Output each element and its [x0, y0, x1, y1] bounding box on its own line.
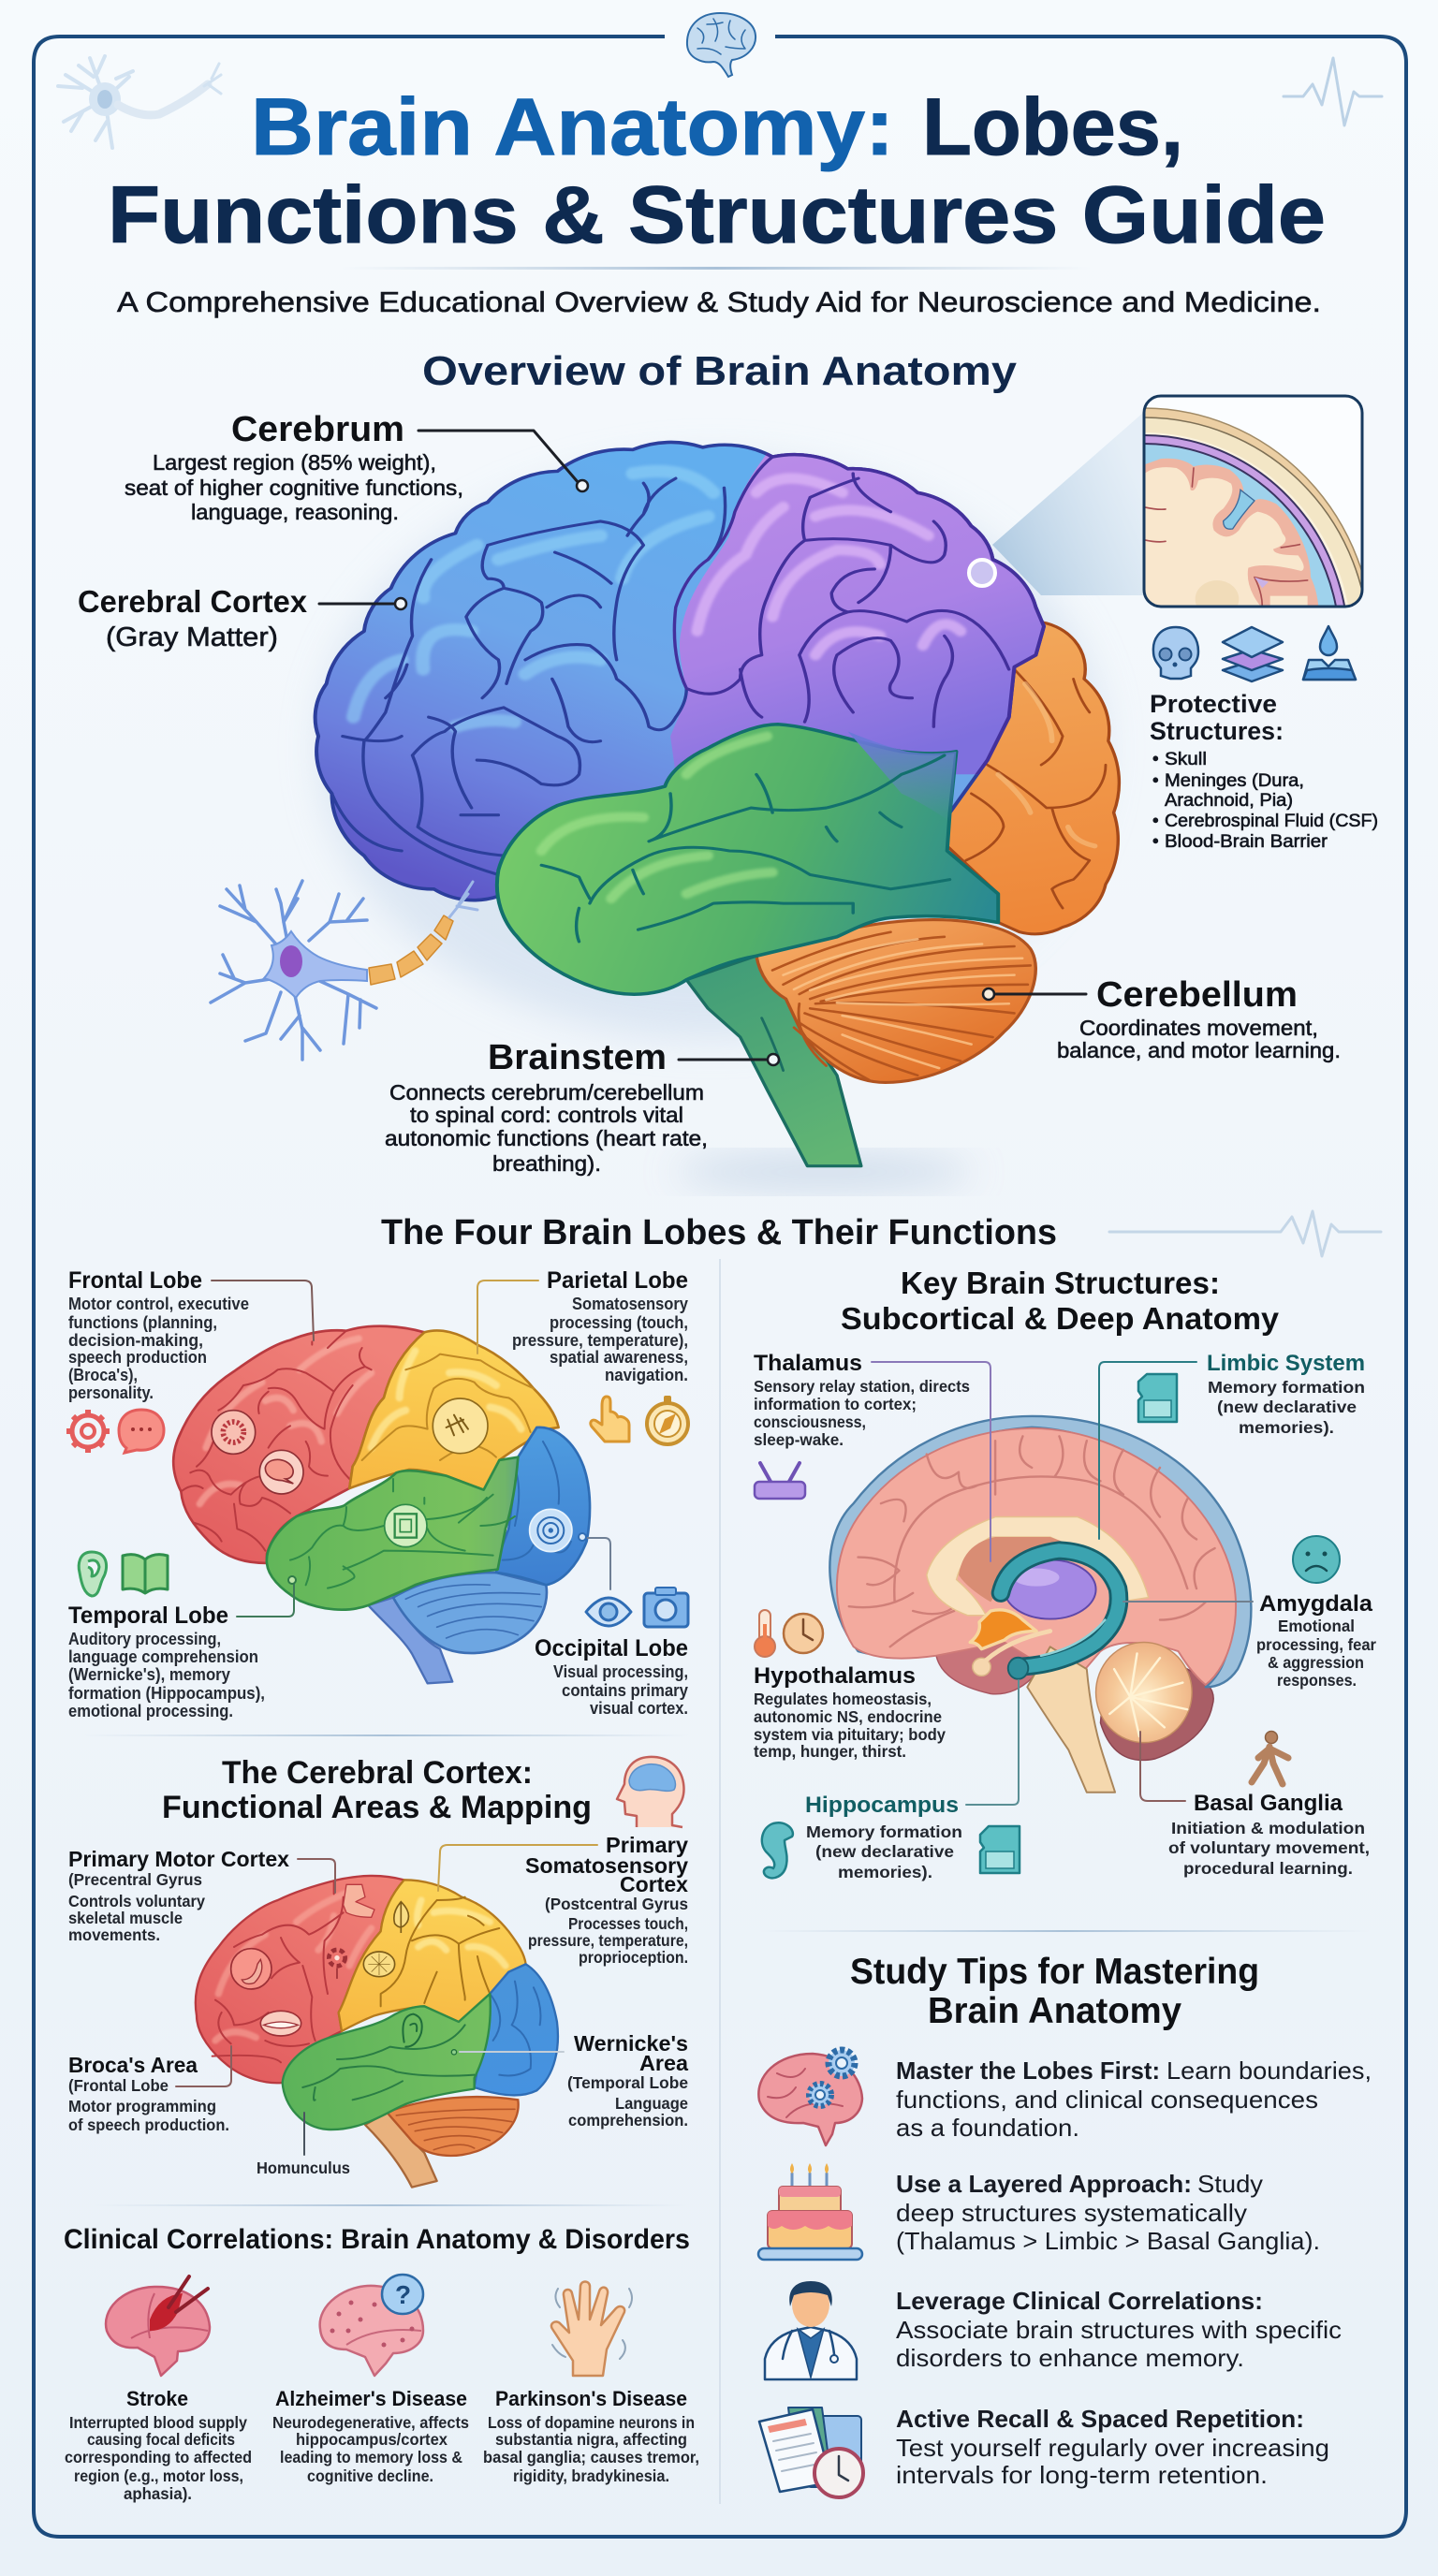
disorder: parkinson's: rigidity, bradykinesia.: [513, 2466, 669, 2485]
callout: temporal lobe: [68, 1576, 296, 1720]
callout: brainstem: Brainstem: [488, 1038, 667, 1077]
callout: thalamus: consciousness,: [754, 1412, 866, 1431]
callout: primary motor cortex: (Precentral Gyrus: [68, 1870, 202, 1889]
icon: ear: [79, 1552, 107, 1596]
callout: primary somatosensory cortex: proprioception.: [579, 1948, 688, 1967]
disorder: alzheimer's: leading to memory loss &: [280, 2448, 462, 2466]
icon: gear: [66, 1410, 110, 1453]
callout: brainstem: to spinal cord: controls vital: [410, 1103, 683, 1127]
callout: frontal lobe: Motor control, executive: [68, 1295, 249, 1313]
protective structures text: Meninges (Dura,: [1165, 771, 1304, 791]
protective structures text: Arachnoid, Pia): [1165, 791, 1293, 811]
callout: primary motor cortex: Controls voluntary: [68, 1892, 205, 1910]
temporal region: [283, 1994, 491, 2130]
brainstem: [686, 956, 861, 1166]
callout: cerebrum: seat of higher cognitive functions,: [125, 476, 463, 500]
parietal lobe: [349, 1330, 559, 1490]
icon: skull: [1153, 627, 1198, 679]
tip 4: [896, 2405, 1329, 2489]
title: Brain Anatomy:: [251, 82, 894, 172]
icon: faint heartbeat line: [1284, 58, 1382, 125]
tip 3: [896, 2287, 1342, 2372]
heading: cerebral cortex: The Cerebral Cortex:: [222, 1755, 533, 1791]
protective structures text: Structures:: [1150, 717, 1284, 745]
icon: memory card: [980, 1826, 1020, 1873]
callout: primary somatosensory cortex: (Postcentral Gyrus: [545, 1895, 688, 1913]
cerebellum: [756, 920, 1035, 1082]
heading: cerebral cortex: [162, 1755, 592, 1825]
icon: speech bubble: [119, 1410, 164, 1453]
disorder: stroke: [65, 2387, 252, 2503]
disorder: alzheimer's: Alzheimer's Disease: [275, 2387, 467, 2410]
tip 2: Use a Layered Approach:: [896, 2170, 1192, 2198]
callout: hypothalamus: Regulates homeostasis,: [754, 1690, 932, 1708]
cerebellum and stem: [365, 2097, 519, 2188]
callout: hypothalamus: Hypothalamus: [754, 1663, 916, 1689]
callout: parietal lobe: [477, 1267, 688, 1384]
tip 1: functions, and clinical consequences: [896, 2086, 1318, 2114]
callout: cerebrum: Cerebrum: [231, 410, 404, 449]
callout: limbic system: (new declarative: [1217, 1398, 1357, 1416]
occipital region: [475, 1964, 558, 2095]
callout: cerebellum: balance, and motor learning.: [1057, 1038, 1341, 1062]
callout: hypothalamus: system via pituitary; body: [754, 1725, 946, 1744]
callout: frontal lobe: Frontal Lobe: [68, 1267, 202, 1294]
icon: pointing hand: [591, 1397, 629, 1442]
callout: hippocampus: [805, 1680, 1019, 1881]
callout: basal ganglia: procedural learning.: [1183, 1859, 1353, 1878]
callout: thalamus: sleep-wake.: [754, 1430, 844, 1449]
callout: limbic system: Limbic System: [1207, 1351, 1365, 1376]
tip 3: Leverage Clinical Correlations:: [896, 2287, 1263, 2315]
callout: basal ganglia: Basal Ganglia: [1194, 1791, 1343, 1816]
callout: occipital lobe: contains primary: [562, 1681, 688, 1700]
inset: protective layers cross-section: [1142, 395, 1363, 608]
tip 2: deep structures systematically: [896, 2199, 1247, 2227]
tip 4: Test yourself regularly over increasing: [896, 2434, 1329, 2462]
heading: cerebral cortex: Functional Areas & Mapping: [162, 1790, 592, 1825]
disorder: stroke: Stroke: [126, 2387, 188, 2410]
callout: cerebellum: [983, 975, 1341, 1062]
cerebellum and stem: [368, 1573, 547, 1683]
disorder: parkinson's: basal ganglia; causes tremor,: [483, 2448, 699, 2466]
title: Functions & Structures Guide: [108, 170, 1326, 260]
callout: amygdala: & aggression: [1268, 1653, 1364, 1672]
icon: clock: [784, 1614, 823, 1653]
title: Lobes,: [922, 82, 1183, 172]
tip 2: Study: [1197, 2170, 1263, 2198]
callout: basal ganglia: of voluntary movement,: [1168, 1838, 1370, 1857]
callout: frontal lobe: decision-making,: [68, 1331, 203, 1350]
callout: parietal lobe: Parietal Lobe: [547, 1267, 688, 1294]
callout: hypothalamus: autonomic NS, endocrine: [754, 1707, 942, 1726]
subtitle: A Comprehensive Educational Overview & Study Aid for Neuroscience and Medicine.: [117, 285, 1321, 318]
callout: homunculus: Homunculus: [257, 2159, 350, 2177]
callout: thalamus: [754, 1351, 990, 1561]
icon: memory card: [1138, 1374, 1177, 1422]
callout: broca's area: of speech production.: [68, 2115, 229, 2134]
callout: occipital lobe: Visual processing,: [553, 1662, 688, 1681]
callout: temporal lobe: Temporal Lobe: [68, 1603, 228, 1629]
icon: router: [755, 1463, 805, 1499]
icon: walking figure: [1252, 1732, 1288, 1784]
protective structures text: Cerebrospinal Fluid (CSF): [1165, 812, 1378, 831]
callout: parietal lobe: processing (touch,: [550, 1313, 688, 1332]
callout: brainstem: Connects cerebrum/cerebellum: [389, 1080, 704, 1105]
callout: temporal lobe: language comprehension: [68, 1647, 258, 1666]
icon: sad face: [1293, 1536, 1340, 1583]
cortex brain illustration: [196, 1876, 558, 2188]
icon: meninges layers: [1223, 627, 1283, 681]
disorder: stroke: region (e.g., motor loss,: [74, 2466, 243, 2485]
disorder: parkinson's: Loss of dopamine neurons in: [488, 2413, 695, 2432]
disorder: alzheimer's: hippocampus/cortex: [296, 2430, 448, 2449]
callout: thalamus: Sensory relay station, directs: [754, 1377, 970, 1396]
lobes brain illustration: [173, 1326, 590, 1683]
callout: frontal lobe: functions (planning,: [68, 1313, 217, 1332]
inset cone: [992, 412, 1144, 595]
protective structures text: [1150, 690, 1378, 852]
callout: hippocampus: Hippocampus: [805, 1793, 959, 1818]
callout: temporal lobe: emotional processing.: [68, 1702, 233, 1720]
sagittal brain illustration: [829, 1416, 1251, 1793]
tip 2: (Thalamus > Limbic > Basal Ganglia).: [896, 2227, 1320, 2255]
callout: brainstem: autonomic functions (heart rate,: [385, 1126, 708, 1150]
icon: alzheimer brain with question: [320, 2275, 423, 2376]
callout: parietal lobe: navigation.: [605, 1366, 688, 1384]
callout: broca's area: [68, 2046, 231, 2134]
icon: head with brain: [617, 1757, 683, 1827]
callout: basal ganglia: Initiation & modulation: [1171, 1819, 1365, 1837]
occipital lobe: [496, 1427, 590, 1585]
callout: brainstem: breathing).: [492, 1151, 601, 1176]
icon: open book: [123, 1555, 168, 1593]
disorder: stroke: Interrupted blood supply: [69, 2413, 247, 2432]
callout: broca's area: Broca's Area: [68, 2053, 198, 2077]
callout: wernicke's area: comprehension.: [568, 2111, 688, 2130]
callout: frontal lobe: speech production: [68, 1348, 207, 1367]
lower forebrain: [936, 1633, 1050, 1694]
heading: key brain structures: Subcortical & Deep Anatomy: [841, 1301, 1280, 1336]
callout: hippocampus: memories).: [838, 1863, 932, 1881]
heading: clinical correlations: Clinical Correlations: Brain Anatomy & Disorders: [64, 2224, 690, 2255]
callout: cerebral cortex: (Gray Matter): [106, 622, 278, 652]
icon: faint neuron decoration: [58, 56, 221, 148]
limbic ring: [1001, 1550, 1119, 1667]
disorder: stroke: corresponding to affected: [65, 2448, 252, 2466]
callout: wernicke's area: Language: [615, 2094, 688, 2113]
callout: amygdala: [1123, 1591, 1376, 1690]
callout: amygdala: Amygdala: [1259, 1591, 1373, 1617]
callout: frontal lobe: (Broca's),: [68, 1366, 138, 1384]
callout marker: inset source: [969, 560, 995, 586]
thalamus: [1005, 1559, 1096, 1619]
callout: limbic system: memories).: [1239, 1418, 1334, 1437]
callout: limbic system: [1099, 1351, 1365, 1539]
icon: doctor: [765, 2281, 857, 2379]
icon: eye: [586, 1598, 631, 1626]
callout: wernicke's area: Area: [639, 2051, 688, 2075]
disorder: parkinson's: Parkinson's Disease: [495, 2387, 687, 2410]
occipital lobe: [947, 622, 1119, 934]
callout: wernicke's area: [460, 2031, 688, 2130]
icon: alzheimer brain with question: ?: [395, 2280, 411, 2309]
callout: hypothalamus: temp, hunger, thirst.: [754, 1742, 906, 1761]
callout: amygdala: responses.: [1277, 1671, 1357, 1690]
main brain illustration: [315, 442, 1119, 1187]
callout: cerebral cortex: Cerebral Cortex: [78, 584, 308, 619]
callout: cerebrum: Largest region (85% weight),: [153, 450, 436, 475]
meninges arc: [829, 1416, 1251, 1687]
callout: primary somatosensory cortex: Cortex: [620, 1872, 688, 1896]
callout: primary somatosensory cortex: Primary: [606, 1833, 688, 1857]
callout: thalamus: information to cortex;: [754, 1395, 917, 1413]
callout: amygdala: processing, fear: [1256, 1635, 1376, 1654]
heading: key brain structures: Key Brain Structures:: [901, 1266, 1220, 1300]
protective icons: [1153, 626, 1356, 681]
heading: study tips: Brain Anatomy: [928, 1991, 1181, 2031]
icon: parkinson's trembling hand: [551, 2282, 632, 2376]
protective structures text: •: [1152, 832, 1159, 852]
cerebrum pink folds: [837, 1428, 1236, 1685]
brainstem: [1027, 1647, 1115, 1793]
tip 1: [896, 2056, 1372, 2142]
heading: key brain structures: [841, 1266, 1280, 1336]
callout: occipital lobe: Occipital Lobe: [535, 1635, 688, 1661]
callout: hippocampus: (new declarative: [815, 1842, 954, 1861]
icon: stroke brain: [106, 2276, 210, 2376]
protective structures text: •: [1152, 812, 1159, 831]
callout: basal ganglia: [1140, 1732, 1370, 1878]
title: [108, 82, 1326, 260]
temporal lobe: [267, 1457, 518, 1610]
callout: primary motor cortex: movements.: [68, 1925, 160, 1944]
temporal lobe: [497, 724, 998, 994]
callout: broca's area: (Frontal Lobe: [68, 2076, 169, 2095]
tip 3: disorders to enhance memory.: [896, 2344, 1244, 2372]
icon: heartbeat divider: [1109, 1211, 1381, 1256]
disorder: parkinson's: [483, 2387, 699, 2485]
hypothalamus: [970, 1610, 1050, 1676]
tip 1: Learn boundaries,: [1167, 2056, 1372, 2085]
callout: primary motor cortex: Primary Motor Cortex: [68, 1847, 289, 1871]
heading: study tips: Study Tips for Mastering: [850, 1952, 1259, 1992]
icon: seahorse: [762, 1822, 793, 1878]
callout: parietal lobe: Somatosensory: [572, 1295, 688, 1313]
callout: parietal lobe: spatial awareness,: [550, 1348, 688, 1367]
callout: broca's area: Motor programming: [68, 2097, 216, 2115]
icon: camera: [644, 1588, 688, 1627]
disorder: alzheimer's: cognitive decline.: [307, 2466, 433, 2485]
callout: brainstem: [385, 1038, 779, 1176]
inner ventricle: [959, 1537, 1087, 1602]
cerebrum blue and purple: [315, 442, 1044, 908]
parietal region: [339, 1880, 526, 2031]
tip 1: as a foundation.: [896, 2114, 1079, 2142]
callout: hypothalamus: [754, 1663, 946, 1761]
corpus callosum: [927, 1517, 1149, 1616]
callout: primary somatosensory cortex: [438, 1833, 688, 1967]
icon: thermometer: [755, 1610, 775, 1657]
callout: temporal lobe: (Wernicke's), memory: [68, 1665, 230, 1684]
callout: occipital lobe: visual cortex.: [590, 1699, 688, 1718]
callout: occipital lobe: [535, 1533, 688, 1718]
tip 4: intervals for long-term retention.: [896, 2461, 1268, 2489]
callout: cerebrum: language, reasoning.: [191, 500, 399, 524]
callout: temporal lobe: formation (Hippocampus),: [68, 1684, 265, 1703]
callout: frontal lobe: [68, 1267, 314, 1402]
callout: thalamus: Thalamus: [754, 1351, 862, 1376]
heading: overview: Overview of Brain Anatomy: [422, 348, 1018, 394]
callout: parietal lobe: pressure, temperature),: [512, 1331, 688, 1350]
callout: frontal lobe: personality.: [68, 1383, 154, 1402]
callout: cerebellum: Coordinates movement,: [1079, 1016, 1318, 1040]
callout: primary somatosensory cortex: pressure, temperature,: [528, 1931, 688, 1950]
protective structures text: Skull: [1165, 750, 1207, 769]
callout: wernicke's area: (Temporal Lobe: [567, 2073, 688, 2092]
protective structures text: •: [1152, 771, 1159, 791]
callout: primary somatosensory cortex: Somatosensory: [525, 1853, 688, 1878]
disorder: alzheimer's: Neurodegenerative, affects: [272, 2413, 469, 2432]
callout: limbic system: Memory formation: [1208, 1378, 1365, 1397]
disorder: stroke: aphasia).: [124, 2484, 192, 2503]
callout: wernicke's area: Wernicke's: [574, 2031, 688, 2056]
disorder: alzheimer's: [272, 2387, 469, 2485]
cerebellum outer folds: [1100, 1664, 1213, 1760]
frontal region: [196, 1876, 404, 2083]
protective structures text: Blood-Brain Barrier: [1165, 832, 1328, 852]
tip 1: Master the Lobes First:: [896, 2056, 1160, 2085]
icon: brain with gears: [758, 2050, 862, 2145]
disorder: parkinson's: substantia nigra, affecting: [495, 2430, 687, 2449]
icon: flashcards and clock: [759, 2408, 863, 2497]
protective structures text: Protective: [1150, 690, 1277, 718]
heading: four lobes: The Four Brain Lobes & Their Functions: [381, 1213, 1057, 1252]
callout: hippocampus: Memory formation: [806, 1822, 962, 1841]
callout: temporal lobe: Auditory processing,: [68, 1630, 221, 1648]
callout: amygdala: Emotional: [1278, 1617, 1355, 1635]
icon: top brain emblem: [687, 13, 756, 77]
protective structures text: •: [1152, 750, 1159, 769]
basal ganglia / cerebellum sunburst: [1096, 1642, 1192, 1743]
callout: primary motor cortex: skeletal muscle: [68, 1909, 183, 1927]
frontal lobe: [173, 1326, 424, 1563]
icon: layered cake: [758, 2163, 862, 2260]
tip 3: Associate brain structures with specific: [896, 2316, 1342, 2344]
icon: neuron with myelinated axon: [211, 881, 477, 1060]
icon: csf drop: [1303, 626, 1356, 680]
callout: primary somatosensory cortex: Processes touch,: [568, 1914, 688, 1933]
disorder: stroke: causing focal deficits: [87, 2430, 235, 2449]
callout: primary motor cortex: [68, 1847, 335, 1944]
tip 4: Active Recall & Spaced Repetition:: [896, 2405, 1304, 2433]
callout: cerebellum: Cerebellum: [1096, 975, 1298, 1015]
icon: compass: [647, 1396, 688, 1444]
heading: study tips: [850, 1952, 1259, 2031]
callout: cerebrum: [125, 410, 588, 524]
callout: homunculus: [257, 2113, 350, 2177]
tip 2: [896, 2170, 1320, 2255]
callout: cerebral cortex: [78, 584, 406, 652]
